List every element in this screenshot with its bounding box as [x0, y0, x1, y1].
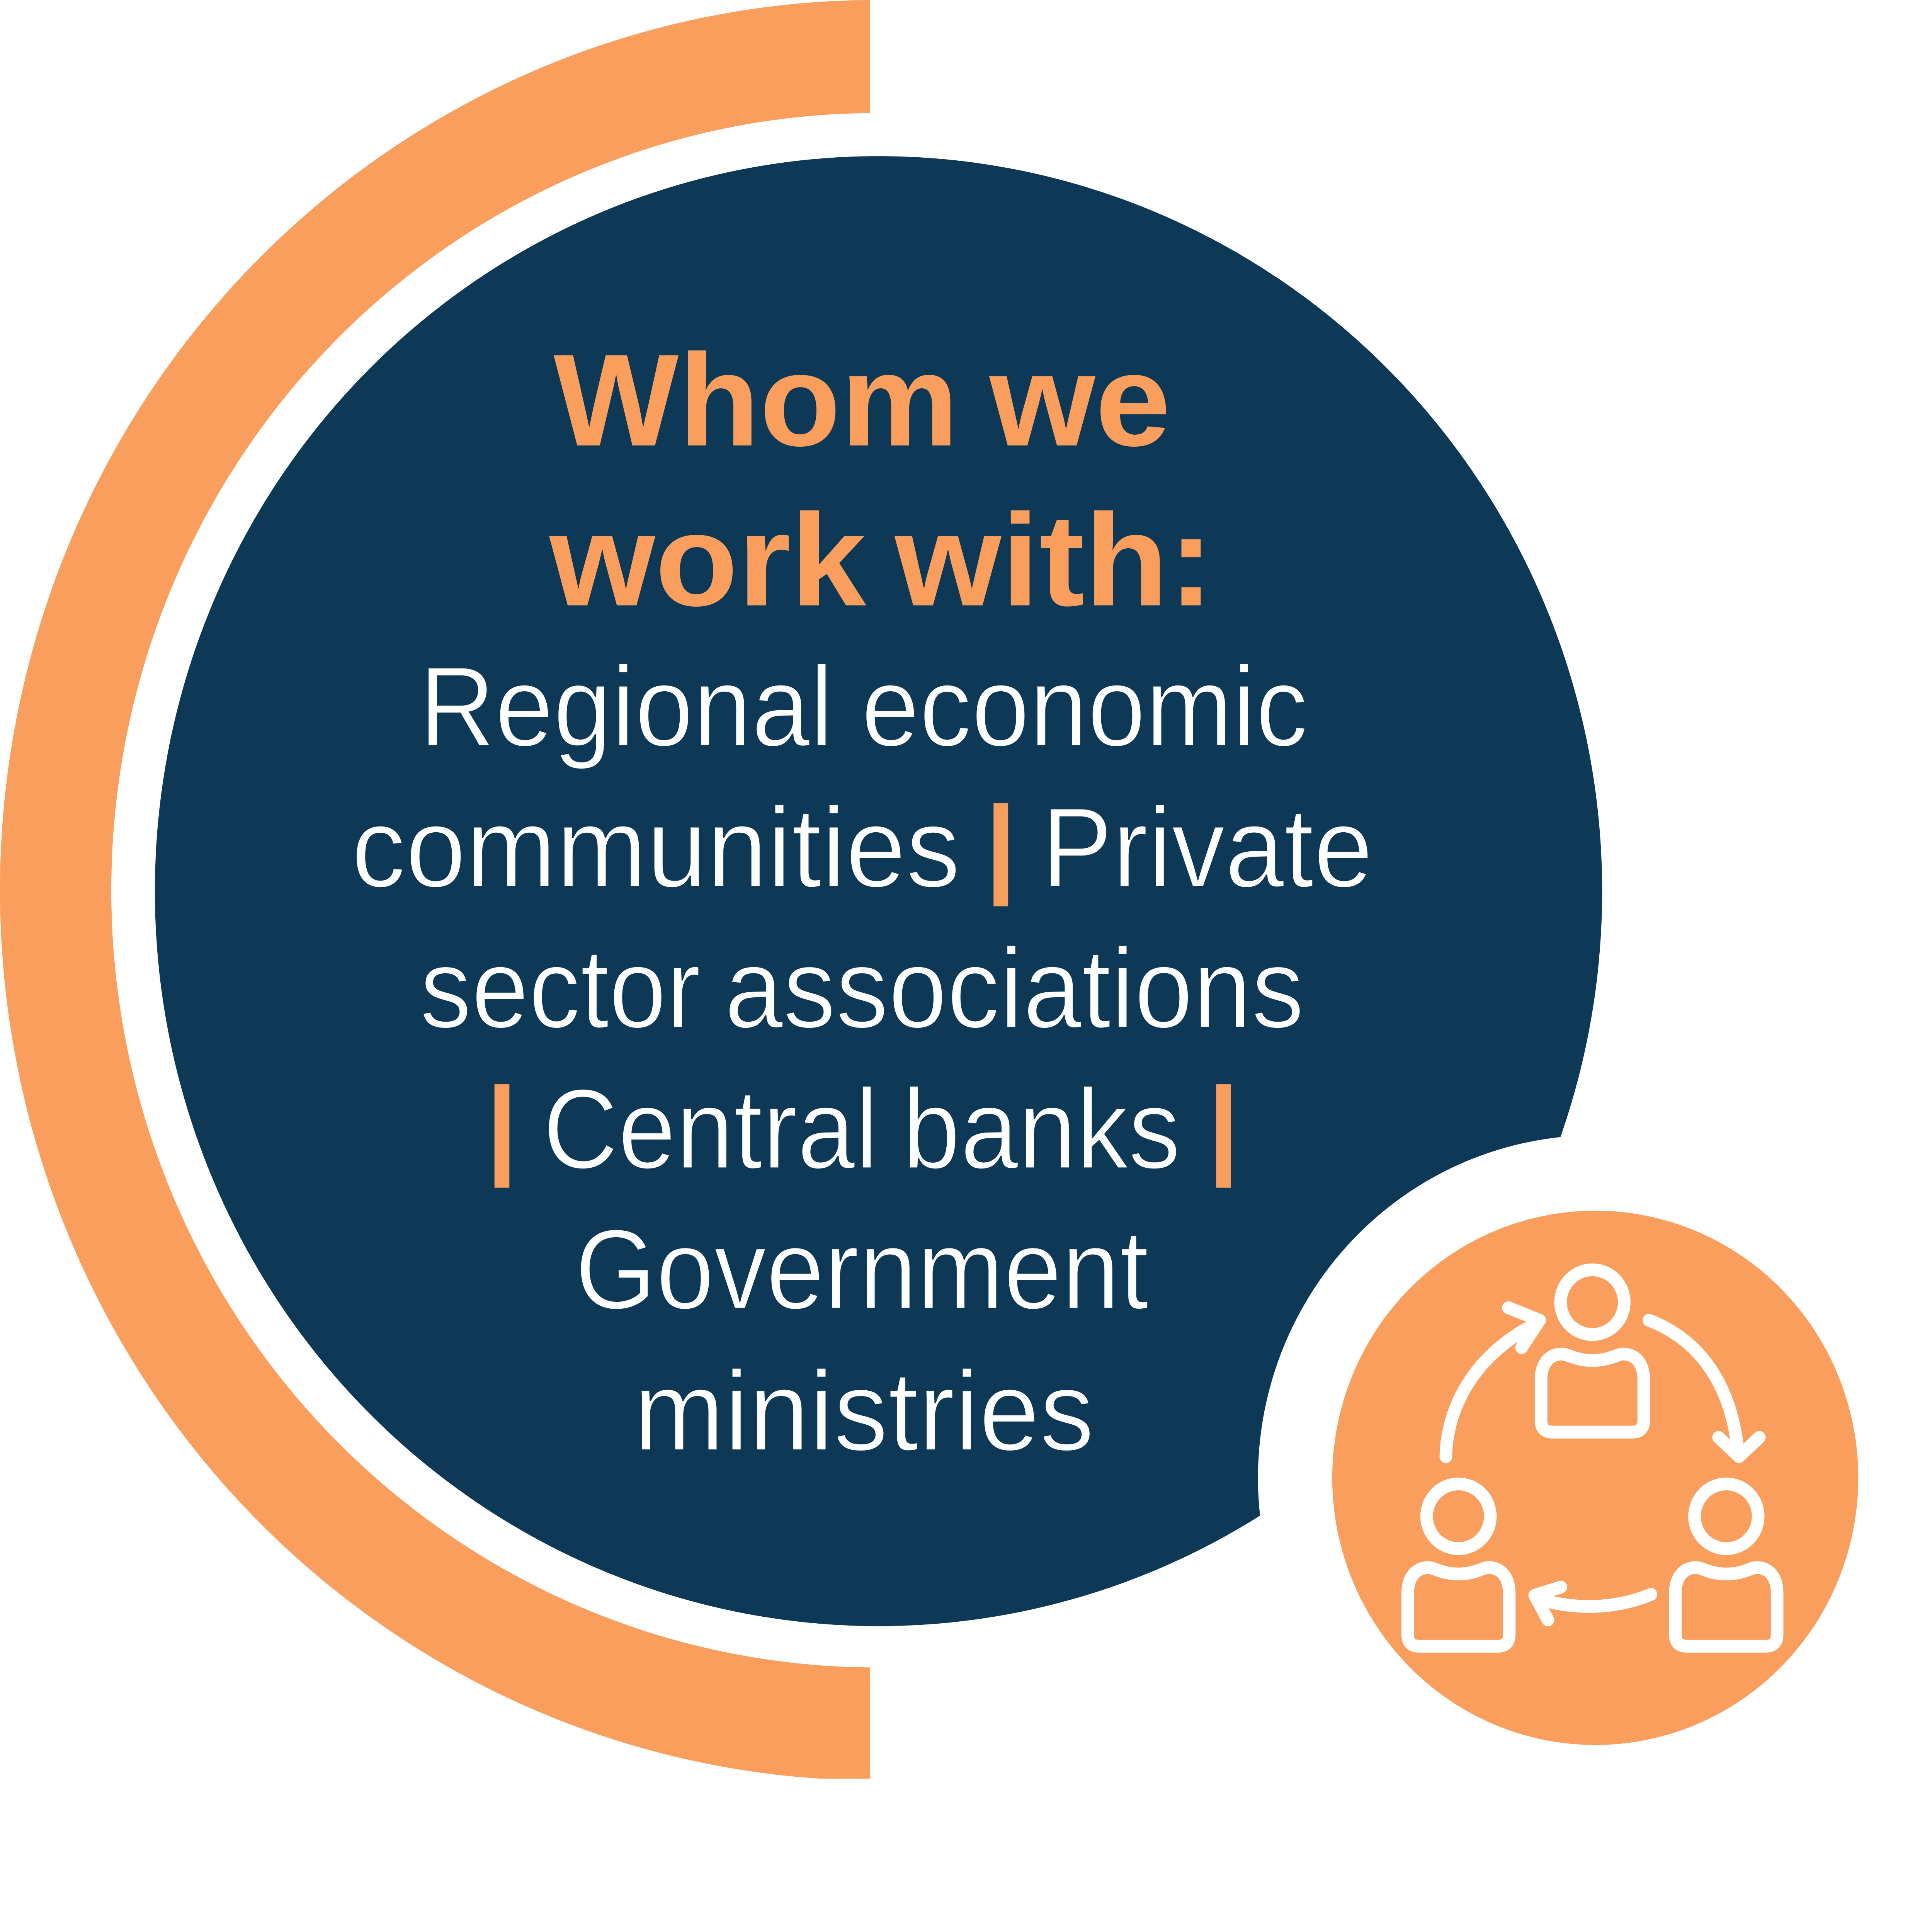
- orange icon circle: [1332, 1211, 1858, 1745]
- heading: Whom: [554, 327, 959, 473]
- icon: left person: [1408, 1484, 1509, 1646]
- white cutout circle: [1258, 1135, 1932, 1820]
- list of partners text: Central: [543, 1065, 878, 1192]
- icon: top person: [1541, 1270, 1644, 1432]
- heading: we: [987, 327, 1171, 473]
- navy main circle: [155, 156, 1602, 1626]
- orange partial ring: [0, 0, 870, 1779]
- list of partners text: Private: [1041, 784, 1373, 911]
- list of partners text: economic: [861, 643, 1308, 770]
- heading: work: [548, 487, 867, 633]
- list of partners text: ministries: [634, 1347, 1094, 1474]
- list of partners text: communities: [351, 784, 960, 911]
- list of partners text: Regional: [419, 643, 833, 770]
- icon: three people exchanging: [1408, 1270, 1777, 1646]
- heading: with:: [893, 487, 1214, 633]
- arrow: right person to left person: [1535, 1587, 1651, 1620]
- list of partners text: associations: [724, 925, 1304, 1052]
- arrow: left person to top person: [1446, 1308, 1540, 1457]
- list of partners text: banks: [902, 1065, 1180, 1192]
- arrow: top person to right person: [1649, 1320, 1759, 1457]
- list of partners text: [351, 643, 1373, 1474]
- heading: [548, 327, 1214, 633]
- icon: right person: [1675, 1484, 1777, 1646]
- list of partners text: sector: [420, 925, 701, 1052]
- list of partners text: Government: [575, 1206, 1149, 1333]
